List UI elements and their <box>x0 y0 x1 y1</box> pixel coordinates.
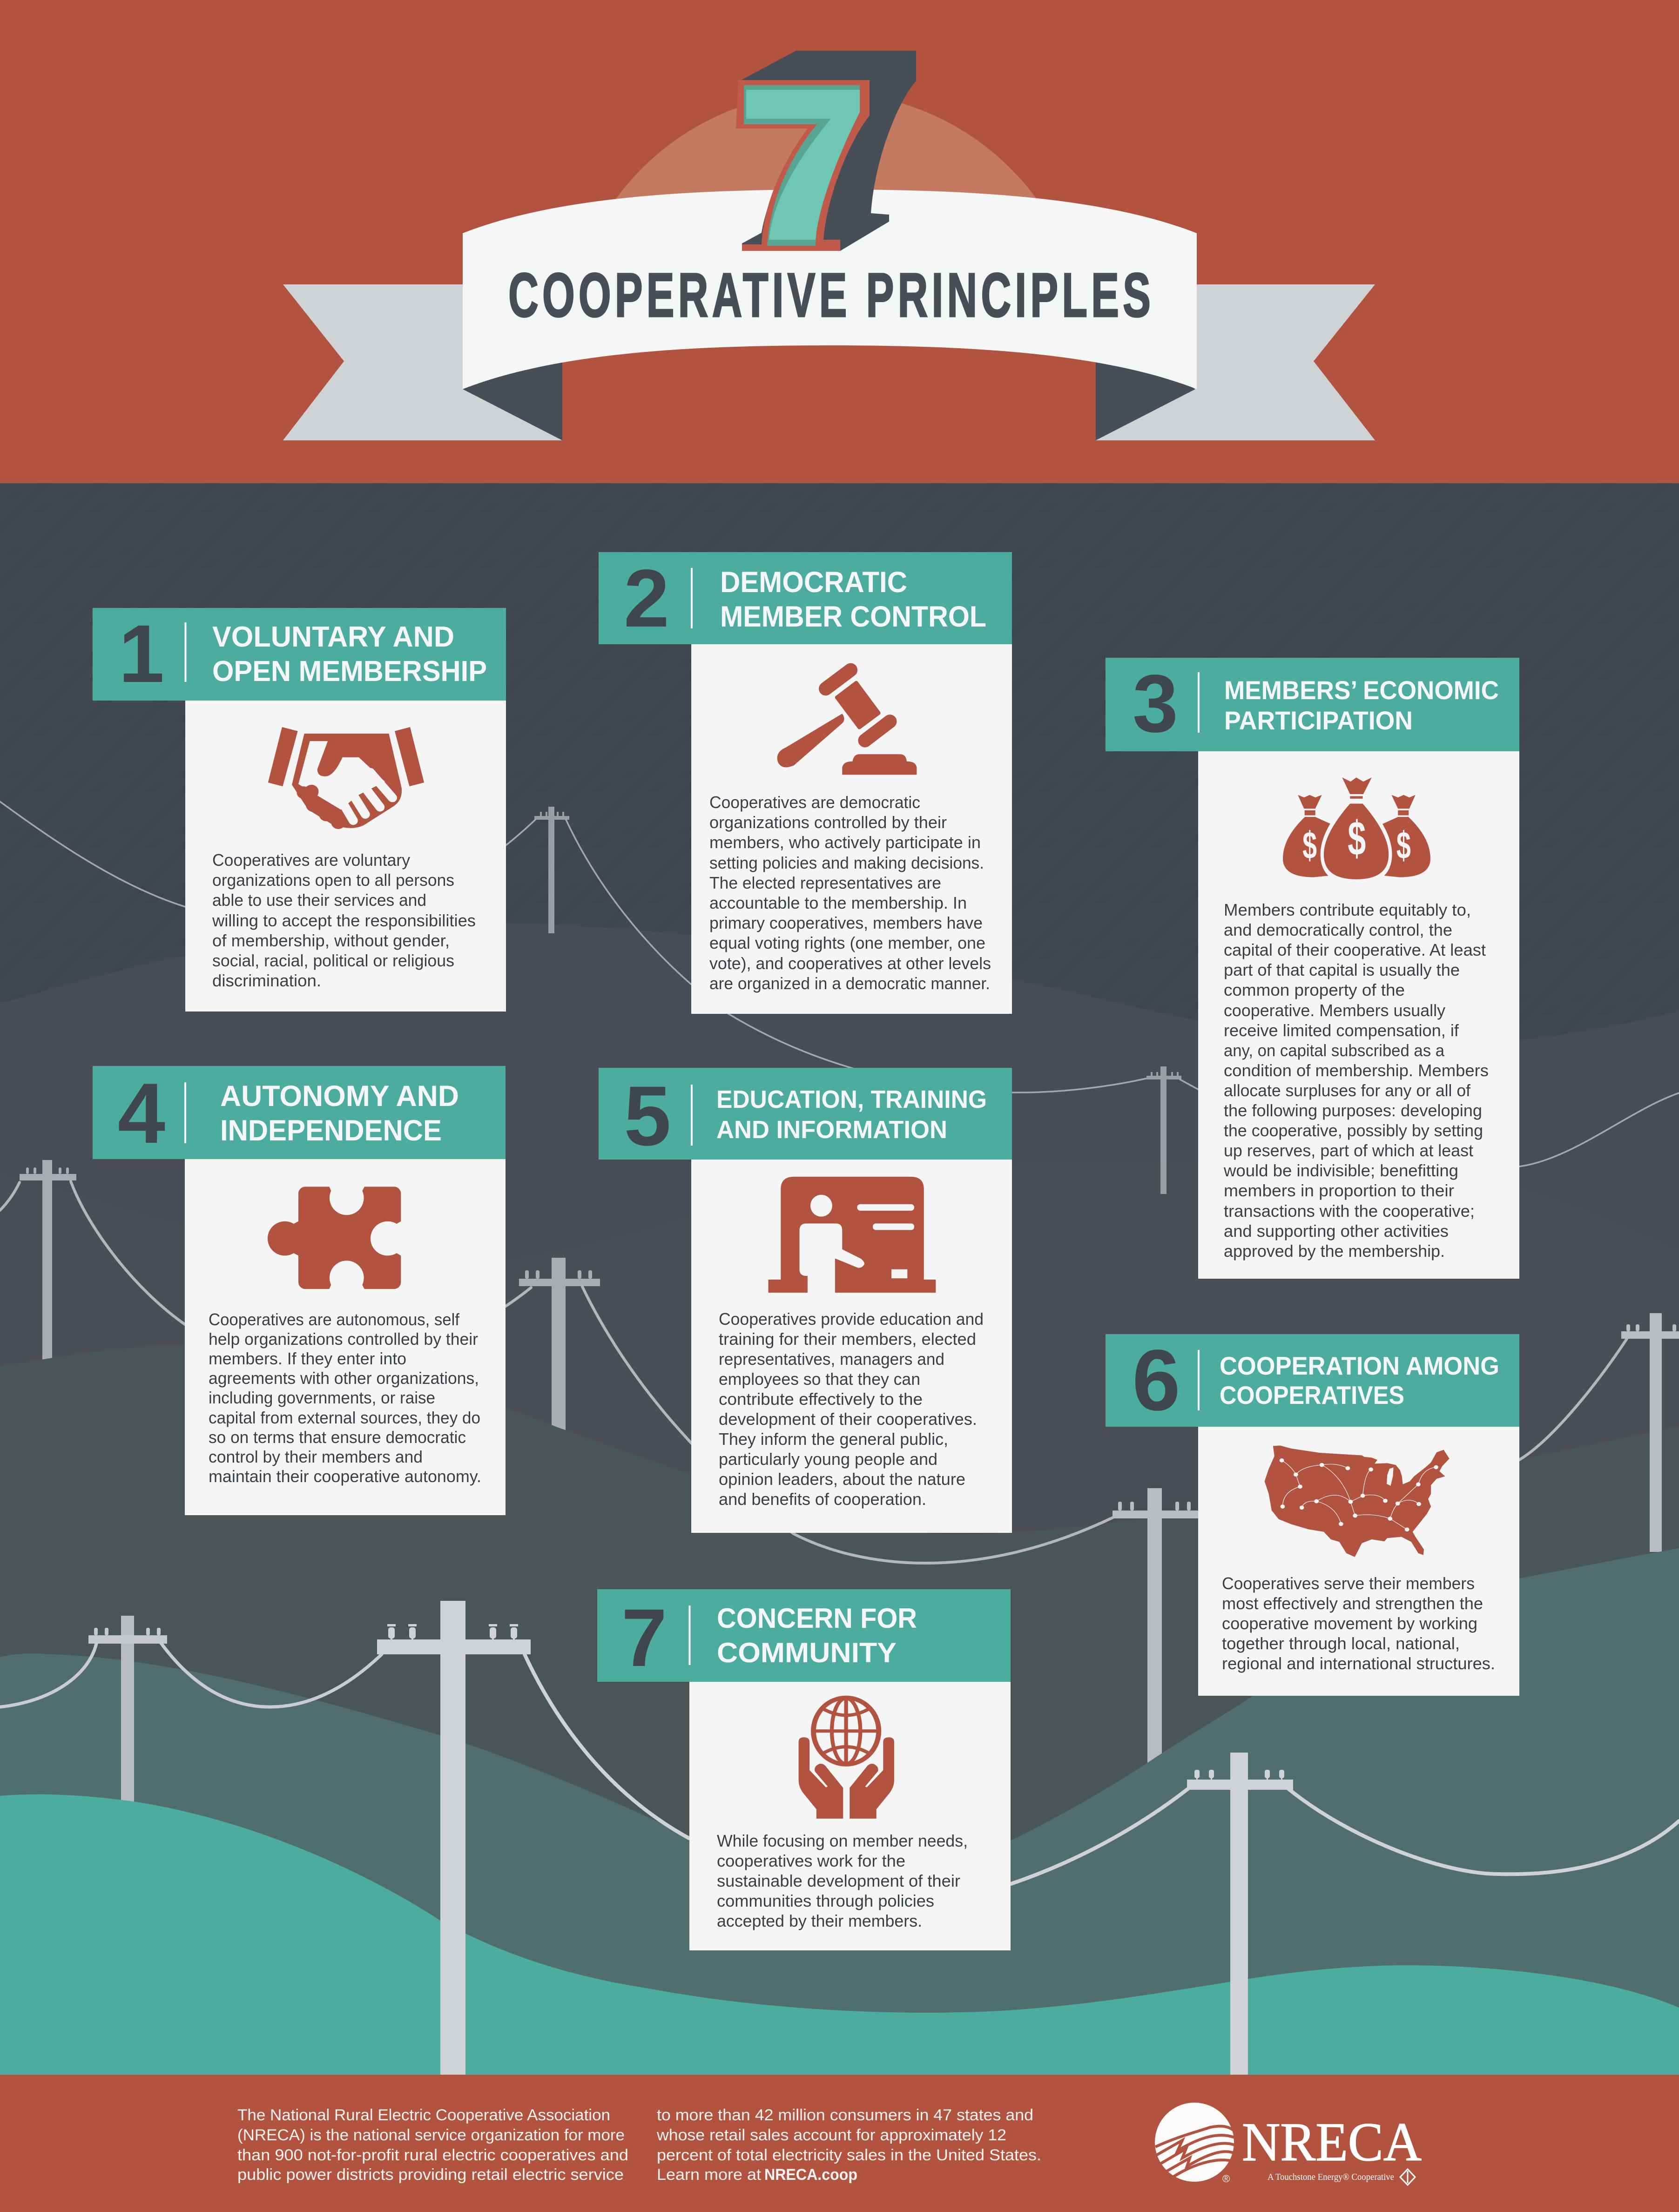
logo wordmark: NRECA <box>1242 2111 1422 2172</box>
heading: COOPERATION AMONG <box>1220 1351 1499 1380</box>
big numeral seven <box>736 51 916 251</box>
background: green hill <box>0 1548 1679 2075</box>
panel: principle 5 <box>599 1068 1012 1533</box>
card header band <box>1106 1334 1519 1427</box>
divider <box>691 1085 693 1146</box>
description: primary cooperatives, members have <box>709 913 983 932</box>
footer band <box>0 2075 1679 2212</box>
description: social, racial, political or religious <box>212 951 454 970</box>
heading: CONCERN FOR <box>717 1603 917 1634</box>
background: teal foreground hill <box>0 1794 1679 2075</box>
heading: OPEN MEMBERSHIP <box>212 655 487 688</box>
description: setting policies and making decisions. <box>709 853 984 872</box>
description: would be indivisible; benefitting <box>1223 1161 1458 1180</box>
description: any, on capital subscribed as a <box>1224 1041 1445 1060</box>
number 7: 7 <box>621 1592 667 1684</box>
icon: handshake <box>268 727 424 829</box>
icon: gavel <box>777 670 917 775</box>
description: Members contribute equitably to, <box>1224 900 1471 919</box>
heading: EDUCATION, TRAINING <box>716 1086 987 1113</box>
description: allocate surpluses for any or all of <box>1224 1081 1471 1100</box>
description: accepted by their members. <box>717 1911 922 1930</box>
logo globe <box>1155 2103 1234 2182</box>
description: cooperative. Members usually <box>1224 1001 1445 1020</box>
description: transactions with the cooperative; <box>1224 1201 1475 1221</box>
number 6: 6 <box>1132 1332 1180 1429</box>
card header band <box>599 552 1012 644</box>
description: together through local, national, <box>1222 1634 1460 1653</box>
description: and supporting other activities <box>1224 1221 1449 1241</box>
ribbon front <box>463 189 1197 389</box>
logo small emblem <box>1400 2169 1415 2185</box>
background: second hill <box>0 1160 1679 1629</box>
registered mark: ® <box>1222 2173 1230 2185</box>
card body <box>1198 1427 1519 1696</box>
ribbon right fold <box>1096 326 1195 440</box>
heading: AND INFORMATION <box>716 1116 947 1144</box>
description: willing to accept the responsibilities <box>212 911 476 930</box>
icon: US map network <box>1265 1445 1450 1557</box>
sun behind the seven <box>584 92 1068 256</box>
description: agreements with other organizations, <box>209 1369 479 1388</box>
description <box>1222 1574 1495 1673</box>
foreground pole right <box>1187 1753 1293 2075</box>
background: distant hill <box>0 923 1679 1396</box>
description: training for their members, elected <box>719 1329 976 1349</box>
heading <box>720 566 986 633</box>
description: development of their cooperatives. <box>719 1409 977 1429</box>
footer text column 1: The National Rural Electric Cooperative Association <box>237 2106 610 2124</box>
heading: VOLUNTARY AND <box>212 621 454 653</box>
description: of membership, without gender, <box>212 931 450 950</box>
heading: COOPERATIVES <box>1220 1381 1404 1409</box>
description: capital from external sources, they do <box>209 1408 480 1427</box>
description: organizations controlled by their <box>709 813 947 832</box>
number 1: 1 <box>119 608 164 700</box>
card header band <box>1106 658 1519 751</box>
description: sustainable development of their <box>717 1871 960 1890</box>
description <box>212 850 476 990</box>
number 4: 4 <box>118 1065 165 1161</box>
divider <box>184 622 186 682</box>
description: regional and international structures. <box>1222 1654 1495 1673</box>
description: Cooperatives provide education and <box>719 1309 984 1329</box>
description <box>717 1831 968 1930</box>
card header band <box>93 1066 506 1159</box>
description <box>209 1310 481 1486</box>
icon: money bags: $ <box>1348 812 1366 865</box>
card body <box>185 1159 506 1515</box>
description: members. If they enter into <box>209 1349 406 1368</box>
description: vote), and cooperatives at other levels <box>709 954 991 973</box>
divider <box>689 1605 691 1665</box>
footer text column 2: percent of total electricity sales in the United States. <box>657 2146 1041 2164</box>
NRECA logo <box>1155 2103 1422 2185</box>
description: They inform the general public, <box>719 1430 948 1449</box>
heading <box>716 1086 987 1144</box>
description: Cooperatives are voluntary <box>212 850 410 870</box>
background: dark green hill <box>0 1345 1679 1862</box>
heading <box>212 621 487 688</box>
heading <box>1224 675 1499 735</box>
panel: principle 6 <box>1106 1332 1519 1696</box>
card body <box>1198 751 1519 1279</box>
background: sky with hatch pattern <box>0 483 1679 1088</box>
heading: DEMOCRATIC <box>720 566 907 599</box>
description: up reserves, part of which at least <box>1224 1141 1473 1160</box>
description: part of that capital is usually the <box>1224 960 1460 979</box>
description: most effectively and strengthen the <box>1222 1594 1483 1613</box>
description: the following purposes: developing <box>1224 1101 1482 1120</box>
icon: money bags <box>1283 777 1430 879</box>
footer text column 2: whose retail sales account for approximately 12 <box>656 2126 1006 2144</box>
description: approved by the membership. <box>1224 1241 1445 1261</box>
description: particularly young people and <box>719 1450 937 1469</box>
mid power lines <box>0 1181 1627 1563</box>
icon: teacher at board <box>769 1177 936 1293</box>
heading: MEMBER CONTROL <box>720 600 986 633</box>
description: Cooperatives are democratic <box>709 793 920 812</box>
description: Cooperatives serve their members <box>1222 1574 1475 1593</box>
heading: PARTICIPATION <box>1224 706 1413 735</box>
title: COOPERATIVE PRINCIPLES <box>508 261 1154 330</box>
divider <box>691 568 693 628</box>
icon: money bags: $ <box>1302 823 1317 867</box>
heading: COMMUNITY <box>717 1637 897 1668</box>
footer text column 1: public power districts providing retail electric service <box>237 2166 624 2184</box>
heading: MEMBERS’ ECONOMIC <box>1224 675 1499 705</box>
description: cooperative movement by working <box>1222 1614 1477 1633</box>
foreground power lines <box>525 1654 1679 1884</box>
foreground pole left <box>377 1601 531 2075</box>
description: able to use their services and <box>212 890 426 910</box>
panel: principle 1 <box>93 608 506 1012</box>
description: members in proportion to their <box>1224 1181 1454 1200</box>
divider <box>184 1082 186 1143</box>
description <box>709 793 991 993</box>
description: capital of their cooperative. At least <box>1224 940 1486 959</box>
heading <box>717 1603 917 1668</box>
card body <box>689 1682 1011 1950</box>
header band <box>0 0 1679 483</box>
panel: principle 2 <box>599 552 1012 1014</box>
card body <box>185 701 506 1012</box>
description: help organizations controlled by their <box>209 1329 478 1349</box>
description: receive limited compensation, if <box>1224 1021 1459 1040</box>
ribbon left tail <box>283 284 562 440</box>
divider <box>1198 672 1200 733</box>
ribbon right tail <box>1096 284 1375 440</box>
number 5: 5 <box>624 1068 671 1163</box>
heading <box>220 1080 459 1147</box>
description: employees so that they can <box>719 1369 920 1389</box>
description: equal voting rights (one member, one <box>709 933 985 952</box>
description: representatives, managers and <box>719 1349 944 1369</box>
description: control by their members and <box>209 1447 423 1466</box>
description: Cooperatives are autonomous, self <box>209 1310 460 1329</box>
logo field stripes <box>1155 2126 1234 2178</box>
description: including governments, or raise <box>209 1388 435 1407</box>
description: are organized in a democratic manner. <box>709 974 990 993</box>
description: accountable to the membership. In <box>709 893 967 912</box>
heading: INDEPENDENCE <box>220 1114 442 1147</box>
logo tagline: A Touchstone Energy® Cooperative <box>1268 2172 1394 2182</box>
footer text column 2: NRECA.coop <box>764 2166 857 2184</box>
description: the cooperative, possibly by setting <box>1224 1121 1483 1140</box>
panel: principle 3 <box>1106 658 1519 1279</box>
footer text column 1 <box>237 2106 628 2184</box>
footer text column 2 <box>656 2106 1041 2184</box>
panel: principle 4 <box>93 1065 506 1515</box>
number 3: 3 <box>1133 658 1178 749</box>
description: so on terms that ensure democratic <box>209 1428 466 1447</box>
ribbon banner <box>283 189 1375 440</box>
description: contribute effectively to the <box>719 1389 923 1409</box>
panel: principle 7 <box>597 1589 1011 1950</box>
far power poles and thin wires <box>0 802 1679 1194</box>
power poles behind the green hill <box>1113 1313 1679 1767</box>
description: communities through policies <box>717 1891 934 1910</box>
description: members, who actively participate in <box>709 833 981 852</box>
description: maintain their cooperative autonomy. <box>209 1467 481 1486</box>
description: discrimination. <box>212 971 321 990</box>
description: common property of the <box>1224 980 1405 999</box>
card header band <box>93 608 506 701</box>
footer text column 1: than 900 not-for-profit rural electric cooperatives and <box>237 2146 628 2164</box>
heading <box>1220 1351 1499 1409</box>
icon: hands holding globe <box>799 1698 894 1819</box>
number 2: 2 <box>624 553 669 644</box>
card header band <box>597 1589 1011 1682</box>
heading: AUTONOMY AND <box>220 1080 459 1113</box>
icon: puzzle piece <box>268 1187 401 1289</box>
description: organizations open to all persons <box>212 870 454 890</box>
description: opinion leaders, about the nature <box>719 1470 965 1489</box>
card body <box>691 1160 1012 1533</box>
footer text column 1: (NRECA) is the national service organization for more <box>237 2126 625 2144</box>
description: The elected representatives are <box>709 873 941 892</box>
description: While focusing on member needs, <box>717 1831 968 1850</box>
card header band <box>599 1068 1012 1160</box>
description: and democratically control, the <box>1224 920 1452 939</box>
small foreground pole <box>0 1616 382 1807</box>
footer text column 2: to more than 42 million consumers in 47 states and <box>657 2106 1033 2124</box>
description: and benefits of cooperation. <box>719 1490 926 1509</box>
description <box>719 1309 984 1509</box>
ribbon left fold <box>463 326 562 440</box>
divider <box>1198 1350 1200 1410</box>
card body <box>691 644 1012 1014</box>
mid power poles <box>20 1160 600 1435</box>
icon: money bags: $ <box>1396 823 1411 867</box>
footer text column 2: Learn more at <box>657 2166 762 2184</box>
description: cooperatives work for the <box>717 1851 905 1870</box>
description <box>1223 900 1489 1261</box>
description: condition of membership. Members <box>1224 1061 1489 1080</box>
